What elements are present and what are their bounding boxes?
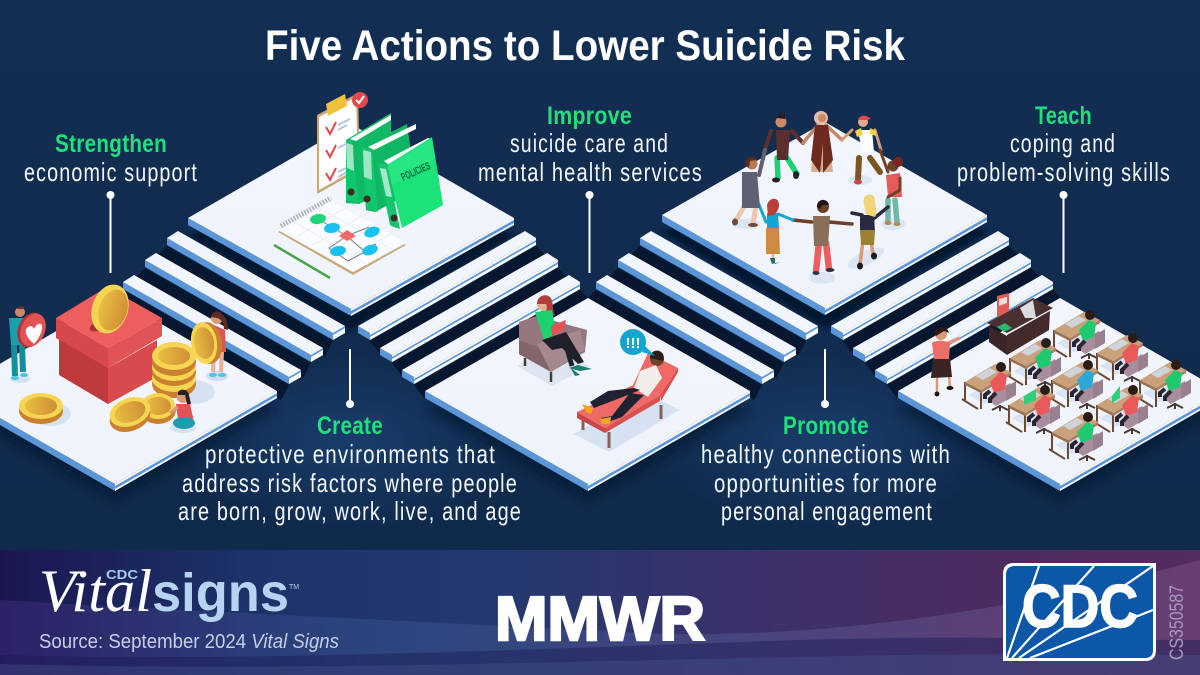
logo: CDC Vital Signs: signs bbox=[152, 563, 289, 623]
icon: coin stack bbox=[152, 342, 215, 404]
icon: people holding hands in circle bbox=[732, 111, 905, 284]
logo: CDC Vital Signs: TM bbox=[289, 584, 299, 591]
icon: person holding coin bbox=[188, 311, 228, 381]
icon: sitting person bbox=[170, 390, 196, 433]
callout: strengthen: economic support bbox=[24, 157, 198, 187]
icon: student desks bbox=[962, 310, 1191, 461]
icon: therapist in armchair bbox=[517, 295, 592, 386]
callout: promote: opportunities for more bbox=[714, 468, 938, 498]
callout: improve: mental health services bbox=[478, 157, 703, 187]
icon: pencil bbox=[274, 245, 330, 278]
logo: CDC Vital Signs bbox=[39, 558, 299, 624]
credit code: CS350587 bbox=[1167, 585, 1188, 660]
callout: strengthen bbox=[24, 130, 198, 273]
panel: improve care platform bbox=[425, 295, 750, 491]
callout: teach bbox=[957, 102, 1171, 273]
icon: person with heart bbox=[9, 306, 50, 383]
stairs: left group bbox=[123, 231, 580, 384]
callout: promote bbox=[701, 349, 951, 526]
title: Five Actions to Lower Suicide Risk bbox=[265, 22, 905, 70]
callout: promote: healthy connections with bbox=[701, 439, 951, 469]
callout: create: protective environments that bbox=[205, 439, 496, 469]
footer band bbox=[0, 550, 1200, 675]
logo: CDC bbox=[1003, 563, 1156, 661]
callout: create: are born, grow, work, live, and age bbox=[178, 496, 522, 526]
logo: CDC Vital Signs: CDC bbox=[106, 567, 139, 582]
callout: promote: Promote bbox=[783, 412, 869, 440]
callout: create: Create bbox=[317, 412, 383, 440]
stairs: right group bbox=[596, 231, 1053, 384]
icon: teacher desk bbox=[987, 293, 1053, 355]
panel: create protective environments platform bbox=[188, 92, 514, 316]
floor shadows bbox=[0, 180, 1200, 503]
callout: strengthen: Strengthen bbox=[55, 130, 167, 158]
callout: teach: Teach bbox=[1035, 102, 1092, 130]
panel: promote healthy connections platform bbox=[662, 111, 987, 315]
icon: speech bubble: !!! bbox=[626, 335, 640, 352]
icon: clipboard with checklist bbox=[317, 92, 368, 194]
callout: improve: Improve bbox=[547, 102, 632, 130]
callout: teach: coping and bbox=[1010, 128, 1116, 158]
callout: improve: suicide care and bbox=[510, 128, 669, 158]
logo: MMWR: MMWR bbox=[495, 585, 705, 654]
icon: notebook with flowchart bbox=[278, 198, 406, 275]
icon: red donation box with coin bbox=[56, 280, 162, 404]
panel: teach skills platform bbox=[898, 293, 1200, 491]
logo: CDC Vital Signs: Vital bbox=[39, 558, 152, 624]
callout: create: address risk factors where people bbox=[182, 468, 518, 498]
callout: create bbox=[178, 349, 522, 526]
logo: CDC: CDC bbox=[1022, 573, 1138, 640]
icon: loose coins bbox=[19, 392, 176, 437]
callout: improve bbox=[478, 102, 703, 273]
icon: speech bubble bbox=[620, 329, 655, 356]
panel: strengthen economic support platform bbox=[0, 280, 277, 491]
icon: patient on red couch bbox=[574, 351, 680, 452]
icon: teacher bbox=[931, 327, 960, 396]
source line: Source: September 2024 Vital Signs bbox=[39, 631, 339, 653]
icon: green policy binders: POLICIES bbox=[399, 160, 433, 184]
callout: promote: personal engagement bbox=[721, 496, 933, 526]
icon: green policy binders bbox=[346, 113, 443, 229]
